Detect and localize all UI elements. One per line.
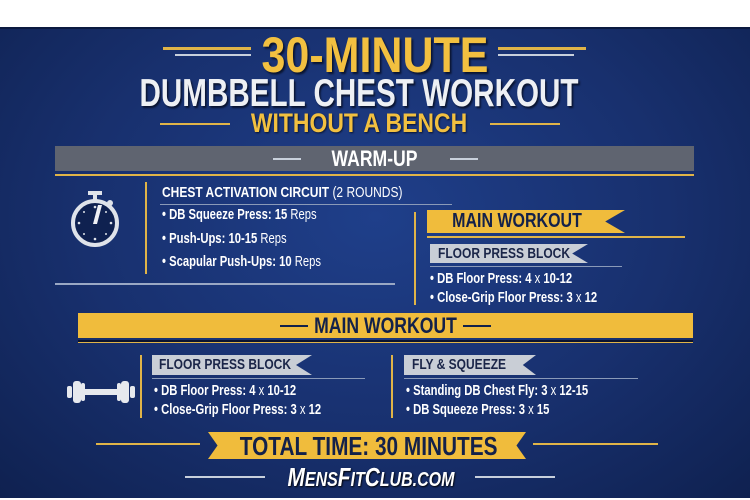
list: floor press: [430, 270, 597, 306]
list: fly & squeeze: [406, 382, 588, 418]
warm-up content: • DB Squeeze Press: 15 Reps: [162, 206, 317, 223]
warm-up content: • Scapular Push-Ups: 10 Reps: [162, 253, 321, 270]
warm-up bar: WARM-UP: [331, 146, 418, 171]
title: 30-MINUTE: 30-MINUTE: [262, 27, 488, 83]
icon: dumbbell: [67, 381, 135, 403]
footer logo: MENSFITCLUB.COM: [288, 462, 454, 492]
warm-up content: CHEST ACTIVATION CIRCUIT (2 ROUNDS): [162, 184, 402, 201]
list: fly & squeeze: • DB Squeeze Press: 3 x 15: [406, 401, 549, 418]
list: floor press: • DB Floor Press: 4 x 10-12: [430, 270, 572, 287]
list: floor press main: • DB Floor Press: 4 x 10-12: [154, 382, 296, 399]
list: floor press main: • Close-Grip Floor Press: 3 x 12: [154, 401, 321, 418]
list: fly & squeeze: • Standing DB Chest Fly: 3 x 12-15: [406, 382, 588, 399]
divider vertical: [145, 182, 147, 274]
subtitle: WITHOUT A BENCH: WITHOUT A BENCH: [251, 108, 467, 138]
tag: MAIN WORKOUT (small): [427, 210, 625, 233]
warm-up content: • Push-Ups: 10-15 Reps: [162, 230, 287, 247]
main workout bar: MAIN WORKOUT: [314, 313, 457, 338]
list: floor press main: [154, 382, 321, 418]
tag: FLOOR PRESS BLOCK (main): FLOOR PRESS BLOCK: [159, 356, 291, 373]
tag: FLY & SQUEEZE: FLY & SQUEEZE: [412, 356, 506, 373]
main workout bar: [78, 313, 693, 338]
tag: MAIN WORKOUT (small): MAIN WORKOUT: [452, 210, 582, 232]
tag: FLOOR PRESS BLOCK: FLOOR PRESS BLOCK: [438, 245, 570, 262]
tag: FLY & SQUEEZE: [404, 355, 536, 375]
icon: stopwatch: [71, 191, 119, 247]
warm-up bar: [55, 146, 694, 171]
total time banner: TOTAL TIME: 30 MINUTES: [240, 431, 498, 461]
list: floor press: • Close-Grip Floor Press: 3 x 12: [430, 289, 597, 306]
title: DUMBBELL CHEST WORKOUT: DUMBBELL CHEST WORKOUT: [139, 72, 579, 115]
warm-up content: [160, 184, 452, 270]
